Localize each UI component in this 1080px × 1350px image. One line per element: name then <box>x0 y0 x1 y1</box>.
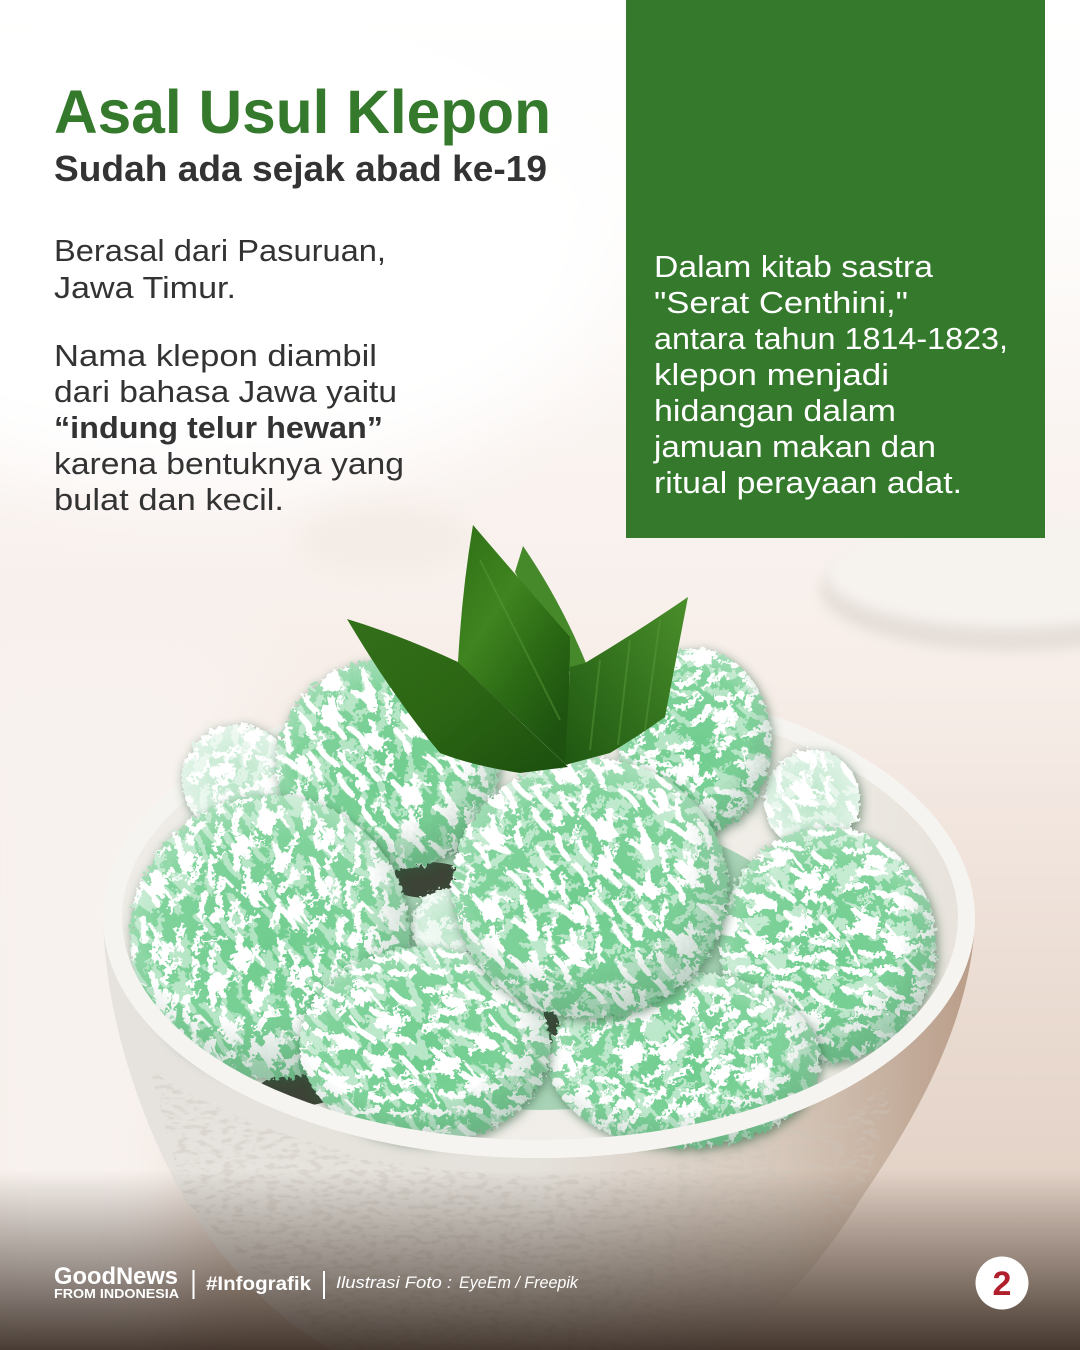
text: Serat Centhini paragraph: ritual perayaan adat. <box>654 465 962 500</box>
photo credit: EyeEm / Freepik <box>459 1274 579 1292</box>
photo credit <box>336 1274 579 1292</box>
page number badge <box>976 1256 1028 1310</box>
text: origin <box>54 233 386 305</box>
ball: back right, pale <box>764 750 860 850</box>
text: name meaning <box>54 338 404 517</box>
text: Serat Centhini paragraph: Dalam kitab sastra <box>654 249 934 284</box>
photo credit: Ilustrasi Foto : <box>336 1274 452 1292</box>
ball: back centre-left <box>276 659 500 871</box>
page number badge: 2 <box>993 1265 1011 1303</box>
ball: front right <box>548 972 820 1148</box>
text: name meaning: karena bentuknya yang <box>54 446 404 481</box>
text: origin: Berasal dari Pasuruan, <box>54 233 386 268</box>
ball: right <box>720 827 936 1063</box>
bowl front lip over balls <box>103 918 975 1158</box>
text: name meaning: dari bahasa Jawa yaitu <box>54 374 397 409</box>
hashtag: #Infografik <box>206 1274 311 1295</box>
footer credits <box>54 1263 579 1301</box>
text: Serat Centhini paragraph: klepon menjadi <box>654 357 889 392</box>
klepon balls in the bowl <box>130 648 936 1148</box>
text: name meaning: “indung telur hewan” <box>54 410 383 445</box>
ball: back right <box>619 648 771 836</box>
text: Serat Centhini paragraph: jamuan makan dan <box>653 429 936 464</box>
bottom dark gradient <box>0 1170 1080 1350</box>
bowl <box>103 678 975 1350</box>
logo: GoodNews from Indonesia: FROM INDONESIA <box>54 1287 179 1301</box>
text: origin: Jawa Timur. <box>54 270 236 305</box>
logo: GoodNews from Indonesia: GoodNews <box>54 1263 178 1290</box>
ball: front left <box>300 947 550 1143</box>
subtitle: Sudah ada sejak abad ke-19 <box>54 148 547 189</box>
ball: left <box>130 795 410 1079</box>
bowl rim <box>103 678 975 1158</box>
text: Serat Centhini paragraph <box>653 249 1008 500</box>
ball: back left, pale <box>182 724 294 836</box>
title: Asal Usul Klepon <box>54 78 551 146</box>
text: Serat Centhini paragraph: antara tahun 1814-1823, <box>654 321 1008 356</box>
text: Serat Centhini paragraph: hidangan dalam <box>654 393 896 428</box>
ball: small middle <box>411 889 479 961</box>
filling under the balls <box>260 810 820 1110</box>
pandan leaf garnish <box>347 525 688 773</box>
bowl outer body <box>103 918 975 1350</box>
text: Serat Centhini paragraph: "Serat Centhini," <box>654 285 908 320</box>
panel: green text box <box>626 0 1045 538</box>
text: name meaning: Nama klepon diambil <box>54 338 377 373</box>
text: name meaning: bulat dan kecil. <box>54 482 284 517</box>
ball: centre top <box>452 758 728 1018</box>
